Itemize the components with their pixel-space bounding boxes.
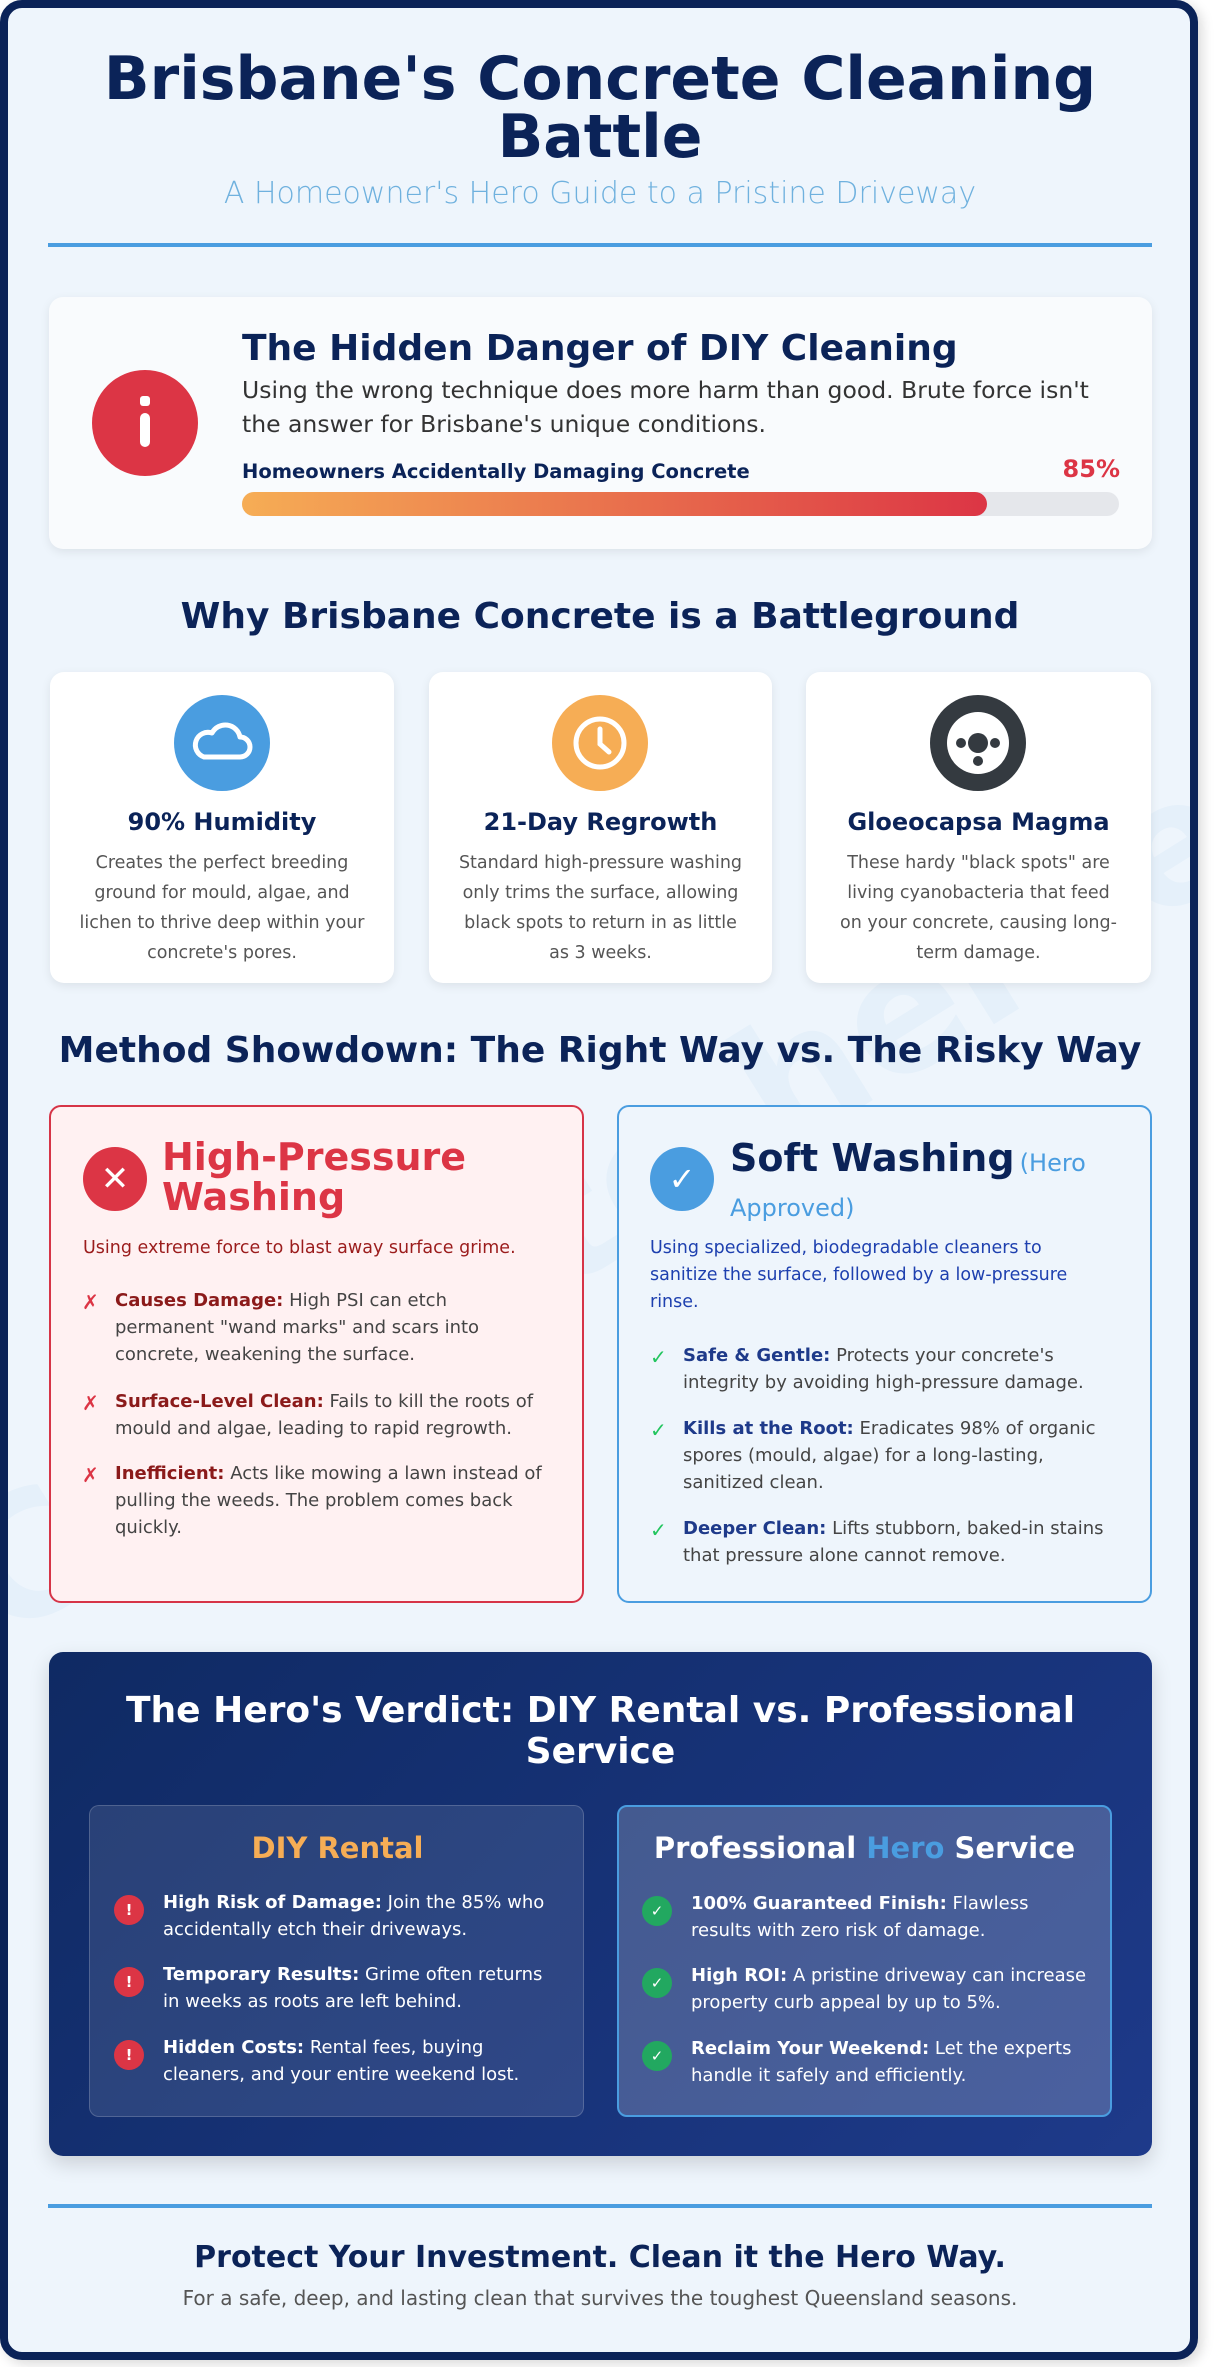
item: Causes Damage: High PSI can etch permanent "wand marks" and scars into concrete, weakening the surface. — [115, 1290, 479, 1365]
icon: bacteria — [930, 695, 1026, 791]
heading: Professional Hero Service — [654, 1831, 1075, 1865]
panel: high-pressure: ✗ — [82, 1391, 99, 1415]
sub-panel: DIY rental: ! — [126, 1901, 132, 1919]
item: High Risk of Damage: Join the 85% who accidentally etch their driveways. — [163, 1892, 544, 1940]
item: Kills at the Root: Eradicates 98% of organic spores (mould, algae) for a long-lasting, sanitized clean. — [683, 1418, 1096, 1493]
heading: The Hidden Danger of DIY Cleaning — [242, 328, 958, 369]
icon: check: ✓ — [669, 1160, 695, 1198]
stat value: 85% — [1063, 455, 1120, 483]
item: Deeper Clean: Lifts stubborn, baked-in stains that pressure alone cannot remove. — [683, 1518, 1104, 1566]
title: Brisbane's Concrete Cleaning Battle — [104, 44, 1096, 172]
footer text: For a safe, deep, and lasting clean that survives the toughest Queensland seasons. — [183, 2286, 1017, 2310]
panel: regrowth — [429, 672, 772, 983]
item: High ROI: A pristine driveway can increase property curb appeal by up to 5%. — [691, 1965, 1086, 2013]
sub-panel: DIY rental: ! — [126, 2046, 132, 2064]
panel: high-pressure — [49, 1105, 584, 1603]
panel: gloeocapsa — [806, 672, 1151, 983]
icon: cloud — [174, 695, 270, 791]
heading: why brisbane: Why Brisbane Concrete is a Battleground — [181, 596, 1019, 637]
panel: humidity — [50, 672, 394, 983]
icon: x: ✕ — [101, 1159, 129, 1199]
panel: soft washing: ✓ — [650, 1345, 667, 1369]
heading: DIY Rental — [252, 1831, 423, 1865]
title: Soft Washing (Hero Approved) — [730, 1136, 1086, 1222]
heading: The Hero's Verdict: DIY Rental vs. Professional Service — [126, 1690, 1075, 1772]
icon: warning — [92, 370, 198, 476]
item: Hidden Costs: Rental fees, buying cleaners, and your entire weekend lost. — [163, 2037, 519, 2085]
item: Safe & Gentle: Protects your concrete's integrity by avoiding high-pressure damage. — [683, 1345, 1084, 1393]
sub-panel: professional: ✓ — [651, 1974, 663, 1992]
title: Gloeocapsa Magma — [847, 808, 1110, 836]
description: Using specialized, biodegradable cleaners to sanitize the surface, followed by a low-pressure rinse. — [650, 1238, 1067, 1312]
text: Using the wrong technique does more harm than good. Brute force isn't the answer for Brisbane's unique conditions. — [242, 376, 1089, 438]
subtitle: A Homeowner's Hero Guide to a Pristine Driveway — [224, 176, 976, 211]
item: 100% Guaranteed Finish: Flawless results with zero risk of damage. — [691, 1893, 1028, 1941]
text: These hardy "black spots" are living cyanobacteria that feed on your concrete, causing long-term damage. — [840, 853, 1117, 963]
title: 90% Humidity — [128, 808, 316, 836]
title: High-Pressure — [162, 1135, 466, 1179]
footer heading: Protect Your Investment. Clean it the Hero Way. — [194, 2240, 1006, 2275]
sub-panel: DIY rental — [89, 1805, 584, 2117]
title — [162, 1135, 466, 1219]
panel: soft washing: ✓ — [650, 1418, 667, 1442]
description: Using extreme force to blast away surface grime. — [83, 1238, 516, 1258]
title: 21-Day Regrowth — [484, 808, 717, 836]
item: Reclaim Your Weekend: Let the experts handle it safely and efficiently. — [691, 2038, 1071, 2086]
sub-panel: DIY rental: ! — [126, 1973, 132, 1991]
item: Inefficient: Acts like mowing a lawn instead of pulling the weeds. The problem comes back quickly. — [115, 1463, 542, 1538]
sub-panel: professional — [617, 1805, 1112, 2117]
panel: high-pressure: ✗ — [82, 1290, 99, 1314]
title: Washing — [162, 1175, 345, 1219]
progress bar — [242, 492, 1119, 516]
icon: check — [650, 1147, 714, 1211]
panel: verdict — [49, 1652, 1152, 2156]
item: Temporary Results: Grime often returns in weeks as roots are left behind. — [163, 1964, 542, 2012]
icon: x — [83, 1147, 147, 1211]
stat label: Homeowners Accidentally Damaging Concrete — [242, 460, 750, 483]
sub-panel: professional: ✓ — [651, 2047, 663, 2065]
text: Standard high-pressure washing only trims the surface, allowing black spots to return in as little as 3 weeks. — [459, 853, 742, 963]
panel: hidden danger — [49, 297, 1152, 549]
sub-panel: professional: ✓ — [651, 1902, 663, 1920]
panel: soft washing: ✓ — [650, 1518, 667, 1542]
heading: method showdown: Method Showdown: The Right Way vs. The Risky Way — [59, 1030, 1141, 1071]
text: Creates the perfect breeding ground for mould, algae, and lichen to thrive deep within your concrete's pores. — [80, 853, 364, 963]
panel: soft washing — [617, 1105, 1152, 1603]
icon: clock — [552, 695, 648, 791]
item: Surface-Level Clean: Fails to kill the roots of mould and algae, leading to rapid regrowth. — [115, 1391, 533, 1439]
panel: high-pressure: ✗ — [82, 1463, 99, 1487]
